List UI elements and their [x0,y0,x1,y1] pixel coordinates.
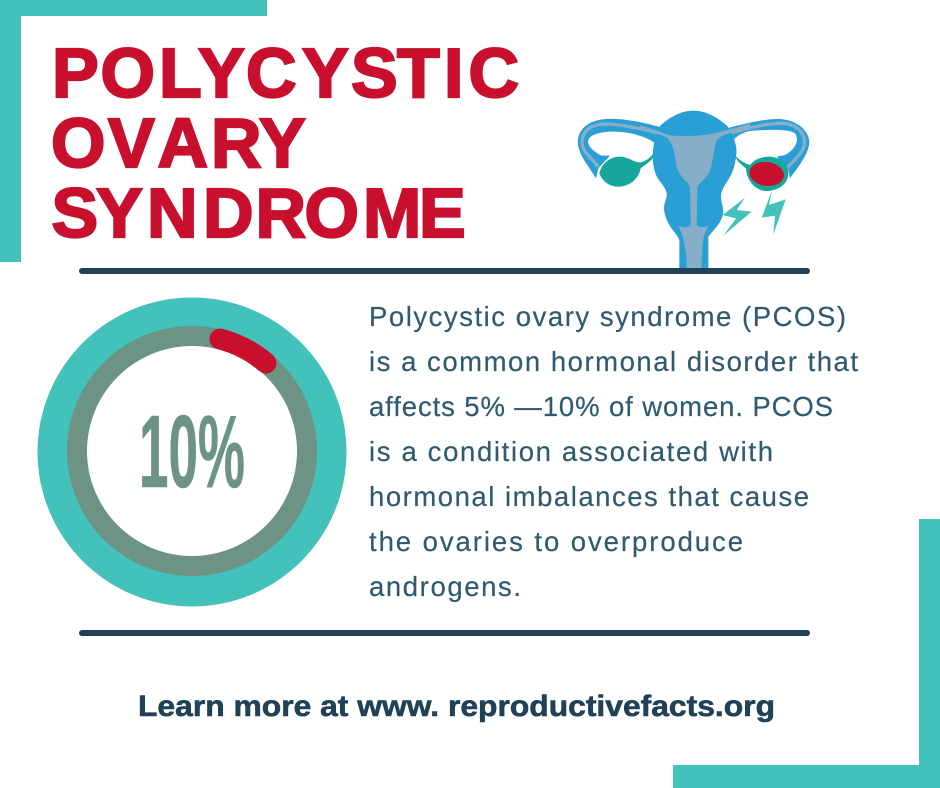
description text: Polycystic ovary syndrome (PCOS) [369,301,846,332]
uterine cavity [640,123,750,268]
title [51,34,519,252]
10% segment [220,339,266,363]
left ovary [599,153,653,187]
top divider [79,268,810,274]
right ovary with cyst and pain bolts [723,155,788,236]
description text: is a condition associated with [369,436,773,467]
description text: androgens. [369,571,521,602]
title: SYNDROME [52,174,466,252]
pain bolt left [723,198,752,236]
pain bolt right [762,191,786,234]
icon: uterus with ovaries and pain bolts [578,111,809,268]
description text [369,301,858,602]
description text: affects 5% —10% of women. PCOS [369,391,833,422]
right fallopian tube [720,119,809,178]
description text: the ovaries to overproduce [369,526,743,557]
footer call to action: Learn more at www. reproductivefacts.org [138,690,775,723]
donut label: 10% [139,394,245,509]
cyst [748,160,786,188]
bottom-right corner bracket [673,519,940,788]
uterus body [640,111,750,268]
left fallopian tube [578,119,670,178]
top-left corner bracket [0,0,267,262]
description text: hormonal imbalances that cause [369,481,809,512]
description text: is a common hormonal disorder that [369,346,858,377]
title: POLYCYSTIC [52,34,519,112]
bottom divider [79,630,810,636]
donut chart: 10% [38,298,346,606]
title: OVARY [51,104,306,182]
